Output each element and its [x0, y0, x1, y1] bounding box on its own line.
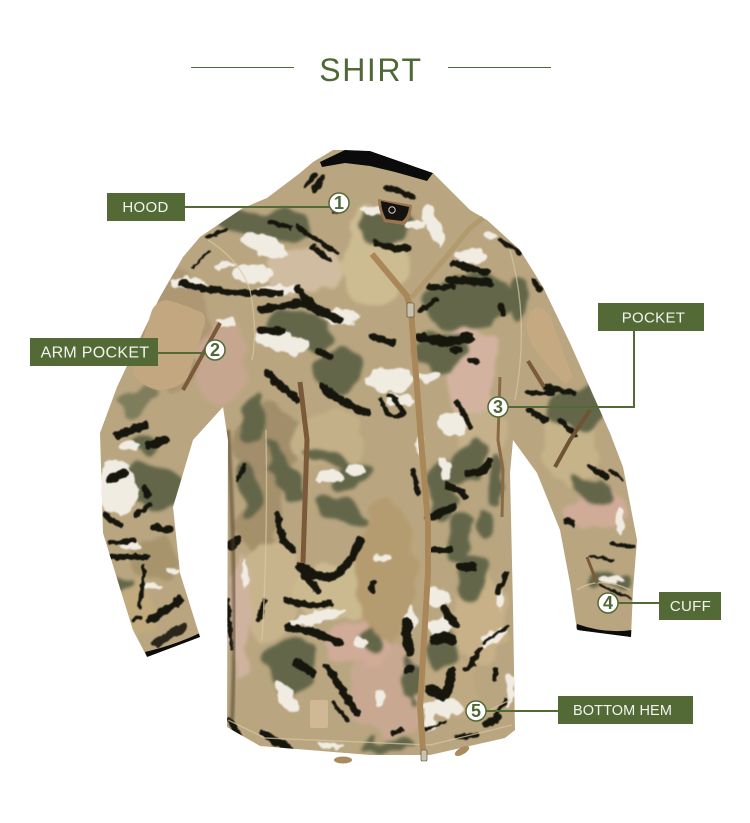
arm and body seams	[208, 240, 630, 745]
black camouflage strokes	[105, 175, 633, 750]
callout 4: CUFF: 4	[603, 593, 613, 613]
white camouflage patches	[97, 201, 625, 748]
right sleeve stripe	[555, 410, 590, 467]
right arm velcro patch	[527, 307, 573, 384]
zipper pulls	[407, 303, 427, 761]
arm pocket zipper	[183, 323, 220, 390]
callout 2: ARM POCKET	[30, 338, 225, 366]
right chest pocket zipper	[498, 377, 503, 517]
callout 1: HOOD: HOOD	[122, 199, 169, 216]
callout 4: CUFF: CUFF	[670, 598, 711, 615]
left chest pocket zipper	[300, 382, 307, 563]
cuff zipper	[587, 557, 597, 583]
right arm pocket zipper	[528, 361, 544, 387]
callout 4: CUFF	[598, 592, 721, 620]
hem logo tab	[310, 700, 328, 728]
callout 3: POCKET	[488, 303, 704, 417]
right cuff opening shadow	[576, 624, 632, 638]
hood inner black lining	[320, 150, 433, 181]
olive camouflage patches	[104, 205, 630, 750]
callout 2: ARM POCKET: 2	[210, 340, 220, 360]
callout 2: ARM POCKET: ARM POCKET	[41, 344, 149, 362]
main zipper	[372, 254, 428, 750]
left body edge shadow	[228, 430, 234, 720]
collar piping	[411, 218, 483, 298]
callout 1: HOOD	[107, 193, 349, 221]
title: SHIRT: SHIRT	[319, 52, 423, 88]
callout 1: HOOD: 1	[334, 193, 344, 213]
callout 5: BOTTOM HEM	[466, 696, 693, 724]
callout 3: POCKET: POCKET	[622, 310, 685, 326]
callout 5: BOTTOM HEM: BOTTOM HEM	[573, 703, 672, 719]
callout 5: BOTTOM HEM: 5	[471, 701, 481, 721]
neck label	[378, 199, 412, 225]
tan and pink camouflage patches	[104, 205, 629, 738]
left arm velcro patch	[132, 300, 205, 390]
sleeve cuff opening shadow	[145, 633, 200, 657]
hem cord toggles	[334, 744, 471, 764]
camouflage fleece jacket	[90, 145, 650, 765]
callout 3: POCKET: 3	[493, 397, 503, 417]
